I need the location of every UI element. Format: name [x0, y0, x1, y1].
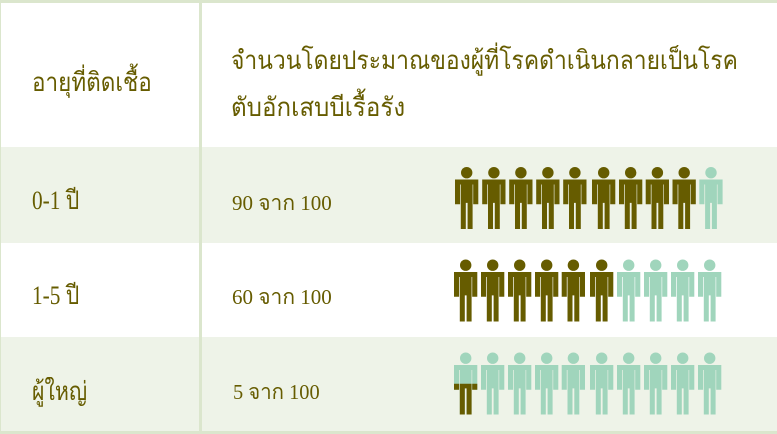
heading: approximate number progressing to chronic hepatitis	[231, 42, 738, 122]
value: 5 of 100: 5 จาก 100	[233, 380, 320, 404]
label: adults: ผู้ใหญ่	[32, 377, 87, 406]
heading: age at infection: อายุที่ติดเชื้อ	[32, 68, 152, 97]
table bottom border	[0, 431, 777, 434]
value: 90 of 100: 90 จาก 100	[232, 191, 332, 215]
column divider	[199, 0, 202, 434]
value: 60 of 100: 60 จาก 100	[232, 285, 332, 309]
pictogram: 5 of 100	[454, 352, 721, 414]
pictogram: 60 of 100	[454, 260, 721, 322]
heading: approximate number progressing to chronic hepatitis: ตับอักเสบบีเรื้อรัง	[231, 93, 405, 122]
pictogram: 90 of 100	[455, 167, 723, 229]
row background: adults	[0, 337, 777, 431]
pictograms	[454, 167, 723, 414]
label: age 0-1: 0-1 ปี	[32, 186, 79, 215]
row background: 0-1 years	[0, 147, 777, 243]
table left border	[0, 0, 1, 434]
heading: approximate number progressing to chronic hepatitis: จำนวนโดยประมาณของผู้ที่โรคดำเนินกลายเป็นโรค	[231, 46, 738, 75]
table top border	[0, 0, 777, 3]
label: age 1-5: 1-5 ปี	[32, 281, 79, 310]
